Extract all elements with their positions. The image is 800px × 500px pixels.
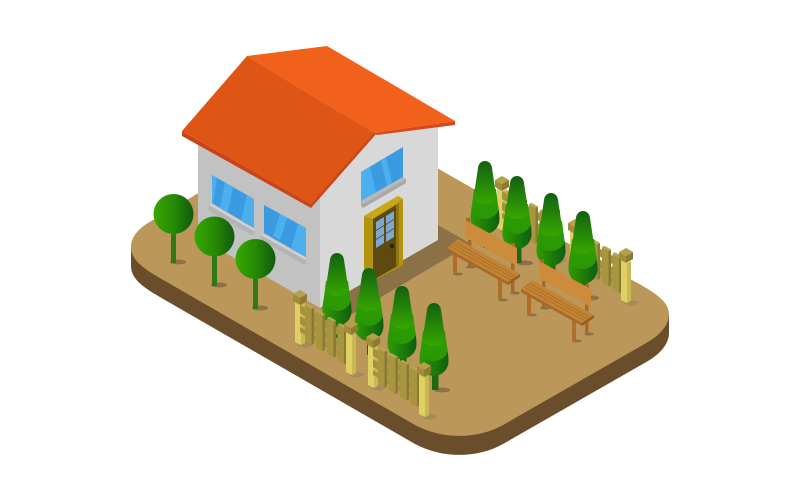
round tree 1 bbox=[154, 194, 194, 264]
roof edge shadow bbox=[182, 131, 376, 208]
round tree 2 bbox=[194, 216, 234, 288]
door knob bbox=[390, 244, 394, 248]
window: left wall second bbox=[261, 205, 306, 265]
house shadow on ground bbox=[320, 225, 471, 317]
front row cone trees bbox=[322, 253, 450, 392]
right wall bbox=[320, 125, 438, 308]
front fence segment left bbox=[293, 290, 365, 378]
window: right wall bbox=[361, 147, 406, 208]
front fence segment right bbox=[366, 333, 438, 420]
back fence segments and posts bbox=[495, 176, 640, 306]
house bbox=[182, 46, 455, 308]
door panes bbox=[376, 211, 394, 248]
left wall bbox=[198, 145, 320, 308]
roof right plane bbox=[247, 46, 455, 133]
ground platform side bbox=[131, 132, 669, 455]
round tree 3 bbox=[236, 239, 276, 310]
bench 2 bbox=[521, 259, 594, 342]
ground platform top bbox=[131, 113, 669, 436]
door bbox=[364, 196, 403, 285]
roof left plane bbox=[182, 56, 374, 204]
bench 1 bbox=[447, 218, 520, 302]
back row cone trees bbox=[470, 161, 599, 300]
window: left wall first bbox=[209, 175, 254, 236]
